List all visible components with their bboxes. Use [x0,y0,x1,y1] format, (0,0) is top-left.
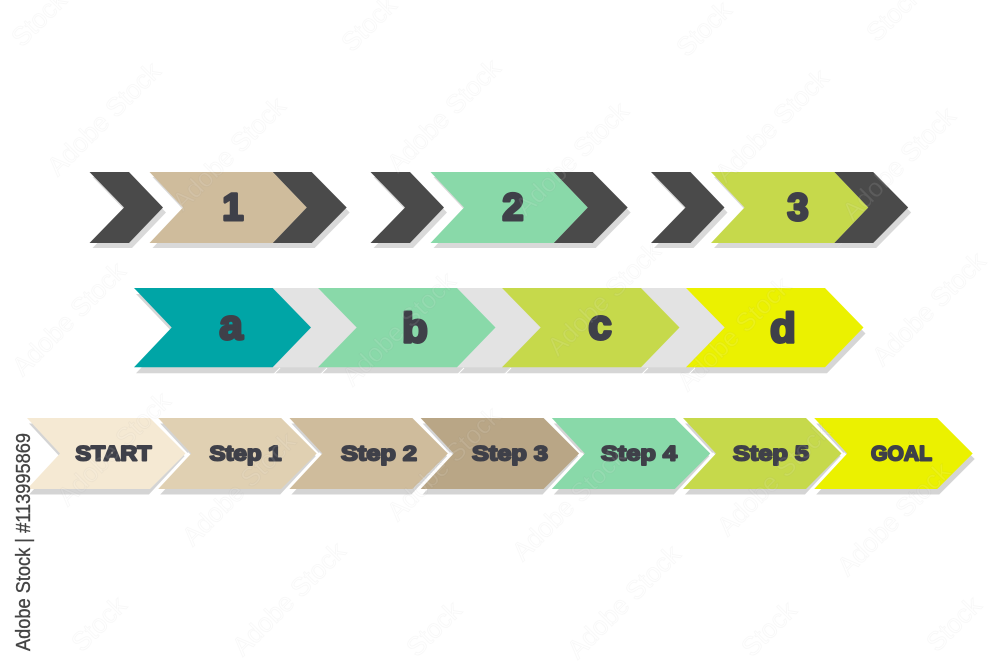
group: step 1 chevrons: 1 [222,187,244,229]
group: step 3 chevrons [651,172,911,248]
step 4 arrow: Step 4 [601,442,677,466]
group: step 2 chevrons [370,172,631,248]
goal arrow [814,418,973,489]
group: step 2 chevrons: 2 [502,187,524,229]
step 1 arrow [158,418,317,489]
start arrow [27,418,186,489]
step 3 arrow: Step 3 [472,442,548,466]
group: step 3 chevrons: 3 [787,187,809,229]
watermark pattern: Adobe Stock [6,255,132,381]
watermark pattern: Stock [65,589,133,657]
step 5 arrow [683,418,842,489]
step 5 arrow: Step 5 [733,442,809,466]
arrow d [686,288,864,367]
watermark pattern: Stock [920,589,988,657]
watermark pattern: Adobe Stock [711,415,837,541]
watermark pattern: Adobe Stock [866,245,992,371]
arrow b: b [402,304,428,352]
watermark pattern: Adobe Stock [671,270,797,396]
watermark pattern: Adobe Stock [381,400,507,526]
step 4 arrow [552,418,710,489]
group: step 1 chevrons [90,172,350,248]
arrow c: c [588,301,612,348]
step 1 arrow: Step 1 [210,442,282,466]
watermark pattern: Adobe Stock [41,55,167,181]
watermark pattern: Adobe Stock [226,535,352,661]
watermark pattern: Adobe Stock [506,440,632,566]
arrow a: a [219,301,243,348]
watermark pattern: Adobe Stock [509,95,635,221]
watermark pattern: Stock [400,594,468,662]
watermark pattern: Adobe Stock [836,100,962,226]
watermark pattern: Adobe Stock [561,538,687,664]
row: a b c d arrows [134,288,866,374]
watermark pattern: Stock [735,594,803,662]
watermark pattern: Adobe Stock [831,455,957,581]
start arrow: START [76,442,152,466]
arrow d: d [770,304,796,352]
watermark pattern: Adobe Stock [541,235,667,361]
step 2 arrow: Step 2 [341,442,417,466]
watermark pattern: Adobe Stock [336,265,462,391]
arrow c [502,288,680,367]
step 2 arrow [289,418,448,489]
watermark pattern: Adobe Stock [709,62,835,188]
watermark pattern: Adobe Stock [51,385,177,511]
stock id caption: Adobe Stock | #113995869 [13,433,35,651]
arrow b [318,288,496,367]
watermark pattern: Adobe Stock [176,425,302,551]
arrow a [134,288,311,367]
watermark pattern: Adobe Stock [381,52,507,178]
watermark pattern: Adobe Stock [166,90,292,216]
goal arrow: GOAL [871,442,932,466]
row: start to goal process [27,418,975,496]
step 3 arrow [421,418,579,489]
